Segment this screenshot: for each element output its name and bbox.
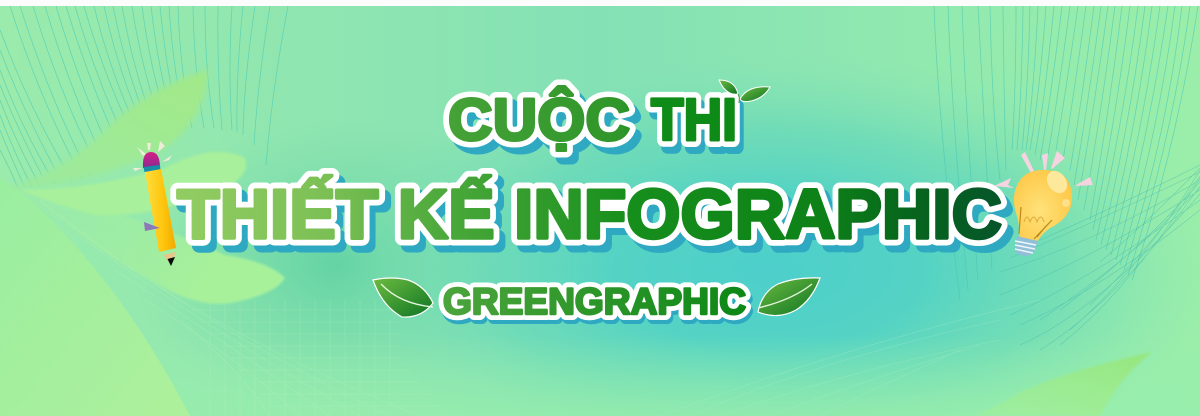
blurred leaf: upper [12, 70, 208, 190]
title line 1: THI [655, 94, 741, 160]
title line 1 [448, 86, 741, 160]
icon: pencil [133, 141, 176, 266]
bottom-left large light shape [0, 178, 190, 416]
title line 1: CUỘC [448, 86, 630, 153]
title line 2: THIẾT KẾ INFOGRAPHIC [177, 175, 1002, 253]
blurred leaf: bottom right [973, 352, 1152, 416]
icon: right leaf [758, 278, 820, 316]
background mesh: lower left [40, 200, 440, 416]
icon: left leaf [373, 278, 433, 317]
title line 1: THI [651, 87, 737, 153]
title line 3: GREENGRAPHIC [443, 281, 746, 322]
icon: leaves above title [719, 80, 770, 103]
title line 2: THIẾT KẾ INFOGRAPHIC [183, 182, 1008, 260]
title line 3: GREENGRAPHIC [445, 285, 748, 326]
background line fan: left [0, 6, 288, 188]
blurred leaf: middle [20, 152, 246, 215]
title line 2: THIẾT KẾ INFOGRAPHIC [177, 175, 1002, 253]
title line 1: CUỘC [454, 93, 636, 160]
background line fan: right [934, 6, 1198, 300]
title line 1: THI [651, 87, 737, 153]
title line 3: GREENGRAPHIC [443, 281, 746, 322]
icon: light bulb [994, 151, 1093, 256]
blurred leaf: lower [30, 198, 285, 304]
background mesh: lower right [1000, 165, 1200, 350]
title line 1: CUỘC [448, 86, 630, 153]
top white strip [0, 0, 1200, 6]
